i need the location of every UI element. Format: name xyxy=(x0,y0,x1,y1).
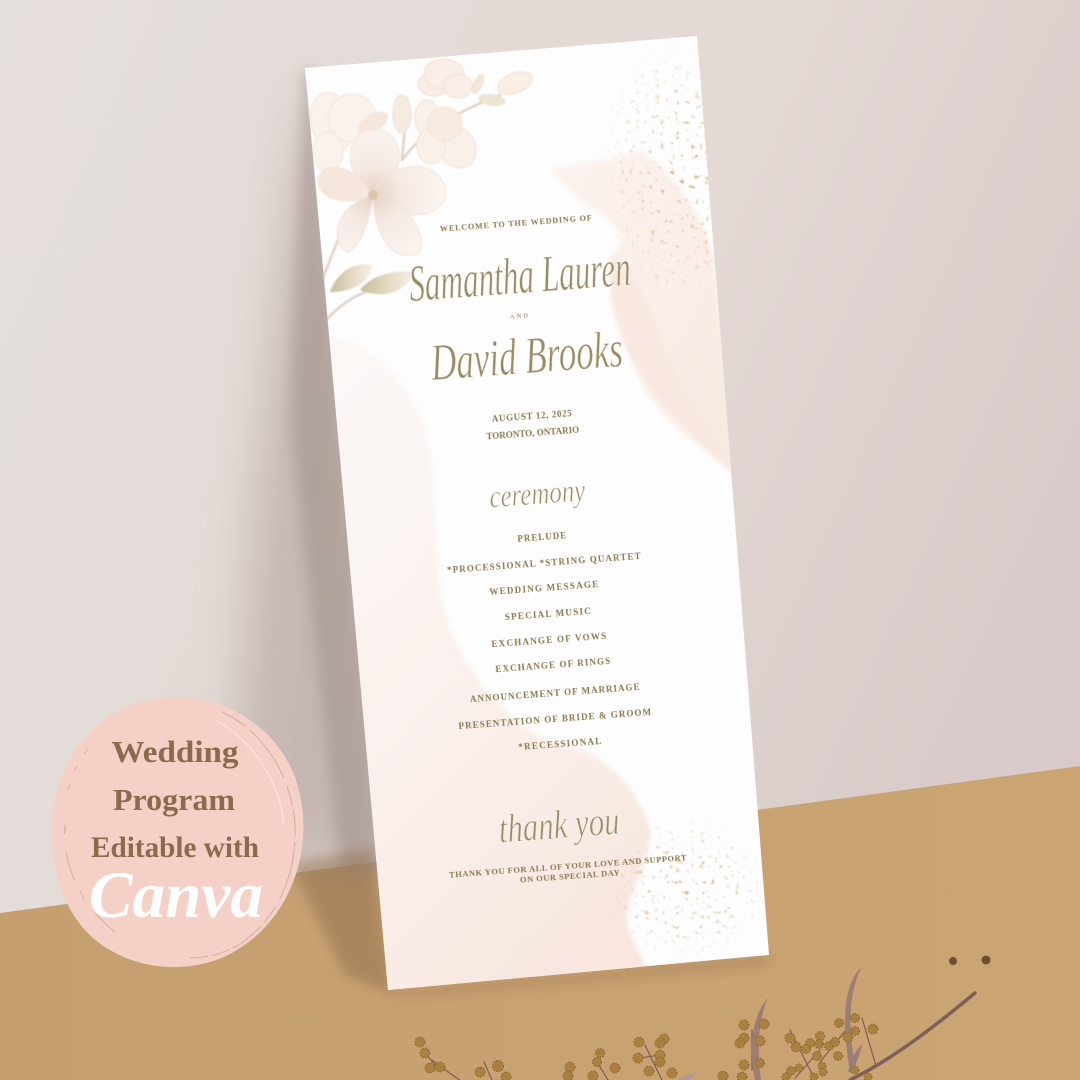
date: AUGUST 12, 2025 xyxy=(492,408,573,424)
left flower xyxy=(310,92,388,171)
recessional: *RECESSIONAL xyxy=(518,736,602,752)
mimosa balls xyxy=(415,1014,878,1080)
branch stems xyxy=(425,993,975,1080)
watercolor wash lower left xyxy=(320,335,650,1000)
narrow card shadow on wall xyxy=(290,70,388,880)
location: TORONTO, ONTARIO xyxy=(486,425,580,441)
badge line: Editable with: Editable with xyxy=(91,831,259,864)
badge line: Program: Program xyxy=(113,782,235,817)
dried mimosa branch xyxy=(415,956,990,1080)
card base xyxy=(305,36,769,990)
stems xyxy=(322,95,500,318)
gold splatter bottom right xyxy=(612,820,760,958)
ceremony order list xyxy=(447,530,652,752)
name: David Brooks: David Brooks xyxy=(428,321,625,392)
badge line: Canva: Canva xyxy=(89,859,263,932)
wedding program card xyxy=(304,30,770,1000)
gold splatter top right xyxy=(605,46,714,292)
presentation: PRESENTATION OF BRIDE & GROOM xyxy=(458,707,652,731)
card artwork xyxy=(304,30,770,1000)
tabletop surface xyxy=(0,766,1080,1080)
prelude: PRELUDE xyxy=(517,530,567,544)
announcement: ANNOUNCEMENT OF MARRIAGE xyxy=(470,682,640,704)
thank you heading: thank you xyxy=(497,798,621,851)
watercolor wash upper right xyxy=(553,150,740,480)
ceremony heading: ceremony xyxy=(488,472,587,514)
exchange of vows: EXCHANGE OF VOWS xyxy=(491,631,606,649)
buds on spray xyxy=(393,67,535,133)
fallen seeds xyxy=(949,956,990,965)
badge circle xyxy=(52,697,303,967)
dried leaves xyxy=(678,968,862,1080)
and: AND xyxy=(510,312,528,321)
right flower xyxy=(414,99,477,169)
wide card shadow on wall xyxy=(225,70,385,880)
brushed ring xyxy=(65,712,295,958)
thank you message line 2: ON OUR SPECIAL DAY xyxy=(520,867,620,885)
name: Samantha Lauren: Samantha Lauren xyxy=(407,240,633,313)
inner fold of wash xyxy=(613,262,716,458)
lower buds xyxy=(330,264,415,294)
processional: *PROCESSIONAL *STRING QUARTET xyxy=(447,551,641,575)
exchange of rings: EXCHANGE OF RINGS xyxy=(495,656,610,674)
wedding message: WEDDING MESSAGE xyxy=(489,579,599,597)
special music: SPECIAL MUSIC xyxy=(505,606,591,622)
floral spray xyxy=(304,59,535,318)
badge line: Wedding: Wedding xyxy=(112,734,239,769)
main flower xyxy=(318,129,446,255)
top flower xyxy=(418,59,472,98)
welcome line: WELCOME TO THE WEDDING OF xyxy=(440,213,592,234)
badge: Editable with Canva xyxy=(52,697,303,967)
card shadow on table xyxy=(290,850,770,997)
thank you message line 1: THANK YOU FOR ALL OF YOUR LOVE AND SUPPORT xyxy=(449,852,687,880)
